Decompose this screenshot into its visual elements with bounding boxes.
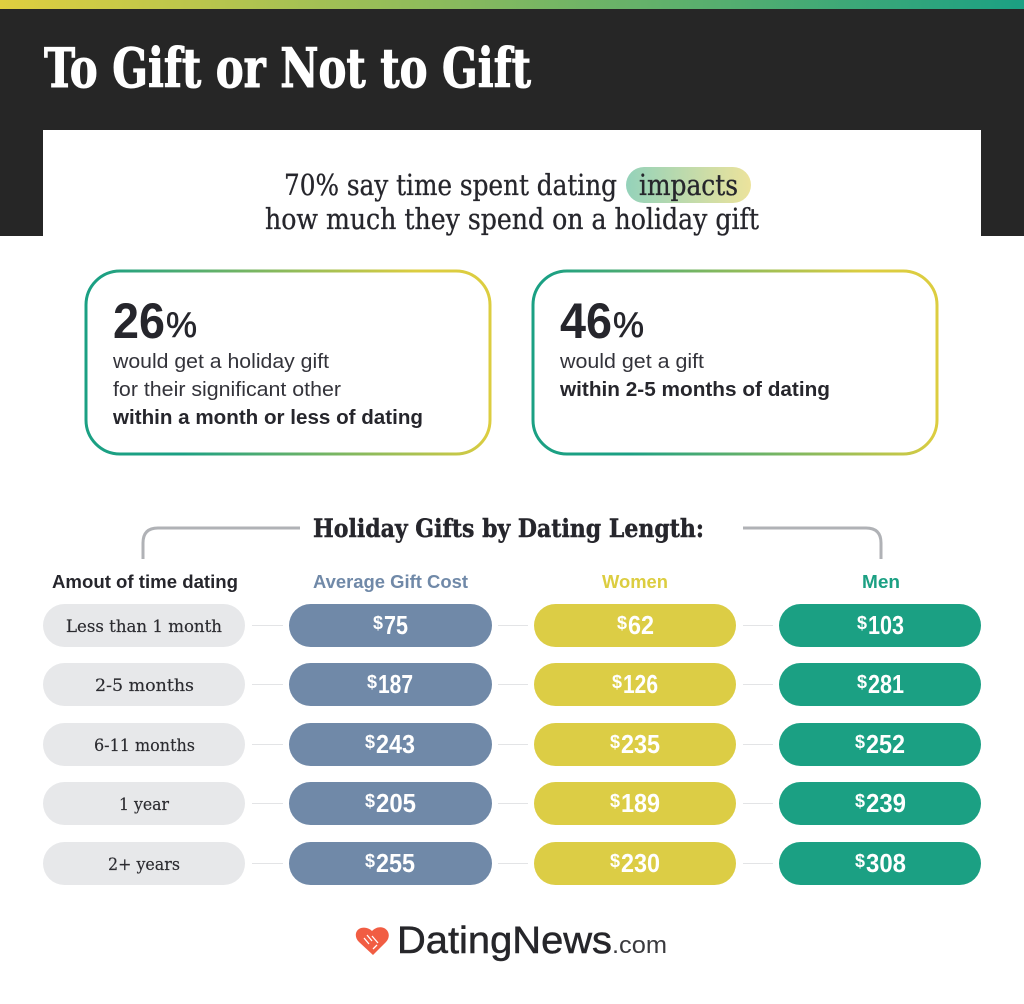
row: 1 year: 205 bbox=[376, 788, 416, 818]
stat card: 26%: would get a holiday gift bbox=[112, 351, 329, 373]
column headers bbox=[52, 572, 900, 592]
stat card: 46%: 46 bbox=[560, 293, 612, 349]
row: 6-11 months: $ bbox=[610, 732, 620, 752]
row: 2-5 months: $ bbox=[857, 672, 867, 692]
row: 2-5 months: $ bbox=[612, 672, 622, 692]
row: 2-5 months: 126 bbox=[623, 669, 658, 699]
icon: heart bbox=[356, 927, 389, 955]
stat card: 26%: % bbox=[166, 306, 197, 345]
column headers: Amout of time dating bbox=[52, 572, 238, 592]
row: 2-5 months: $ bbox=[367, 672, 377, 692]
stat card: 46%: % bbox=[613, 306, 644, 345]
row: 6-11 months: 252 bbox=[866, 729, 905, 759]
stat card: 46% bbox=[533, 271, 937, 454]
row: 1 year: $ bbox=[365, 791, 375, 811]
stat card: 26%: within a month or less of dating bbox=[112, 407, 423, 429]
white intro panel bbox=[43, 130, 981, 237]
row: 2+ years: $ bbox=[365, 851, 375, 871]
stat card: 46%: would get a gift bbox=[559, 351, 704, 373]
logo: DatingNews.com: DatingNews bbox=[397, 920, 612, 962]
row: 2+ years: $ bbox=[855, 851, 865, 871]
row: 1 year: $ bbox=[610, 791, 620, 811]
intro statement: 70% say time spent dating bbox=[284, 168, 617, 202]
row: 6-11 months: $ bbox=[365, 732, 375, 752]
row: 6-11 months: 243 bbox=[376, 729, 415, 759]
row: Less than 1 month: Less than 1 month bbox=[66, 617, 222, 637]
row: 2-5 months bbox=[43, 663, 981, 706]
stat card: 26%: for their significant other bbox=[113, 379, 341, 401]
row: Less than 1 month: 103 bbox=[868, 610, 904, 640]
table heading: Holiday Gifts by Dating Length: bbox=[313, 514, 704, 543]
row: 1 year: 1 year bbox=[119, 795, 170, 815]
highlight pill: impacts bbox=[626, 167, 751, 203]
row: 2+ years: 308 bbox=[866, 848, 906, 878]
stat card: 46%: within 2-5 months of dating bbox=[559, 379, 830, 401]
row: Less than 1 month: 62 bbox=[628, 610, 654, 640]
row: 6-11 months bbox=[43, 723, 981, 766]
row: 2+ years: 230 bbox=[621, 848, 660, 878]
row: 2+ years: 2+ years bbox=[108, 855, 180, 875]
row: 2-5 months: 281 bbox=[868, 669, 904, 699]
row: 1 year: $ bbox=[855, 791, 865, 811]
row: 6-11 months: 235 bbox=[621, 729, 660, 759]
logo: DatingNews.com: .com bbox=[612, 932, 667, 959]
right bracket bbox=[743, 528, 881, 559]
intro statement: how much they spend on a holiday gift bbox=[265, 202, 759, 236]
intro statement: impacts bbox=[639, 168, 738, 202]
left bracket bbox=[143, 528, 300, 559]
column headers: Average Gift Cost bbox=[313, 572, 468, 592]
logo: DatingNews.com bbox=[356, 920, 667, 962]
row: Less than 1 month: $ bbox=[617, 613, 627, 633]
row: 6-11 months: 6-11 months bbox=[94, 736, 195, 756]
stat card: 26% bbox=[86, 271, 490, 454]
row: Less than 1 month: $ bbox=[857, 613, 867, 633]
top gradient bar bbox=[0, 0, 1024, 9]
row: 1 year: 189 bbox=[621, 788, 660, 818]
row: Less than 1 month bbox=[43, 604, 981, 647]
row: 2+ years bbox=[43, 842, 981, 885]
row: 2-5 months: 2-5 months bbox=[95, 676, 194, 696]
intro statement bbox=[265, 167, 759, 236]
row: Less than 1 month: 75 bbox=[384, 610, 408, 640]
row: Less than 1 month: $ bbox=[373, 613, 383, 633]
row: 1 year bbox=[43, 782, 981, 825]
column headers: Women bbox=[602, 572, 668, 592]
dark header band bbox=[0, 9, 1024, 236]
row: 2-5 months: 187 bbox=[378, 669, 413, 699]
row: 2+ years: 255 bbox=[376, 848, 415, 878]
row: 2+ years: $ bbox=[610, 851, 620, 871]
column headers: Men bbox=[862, 572, 900, 592]
title: To Gift or Not to Gift bbox=[44, 36, 531, 100]
stat card: 26%: 26 bbox=[113, 293, 165, 349]
row: 6-11 months: $ bbox=[855, 732, 865, 752]
row: 1 year: 239 bbox=[866, 788, 906, 818]
